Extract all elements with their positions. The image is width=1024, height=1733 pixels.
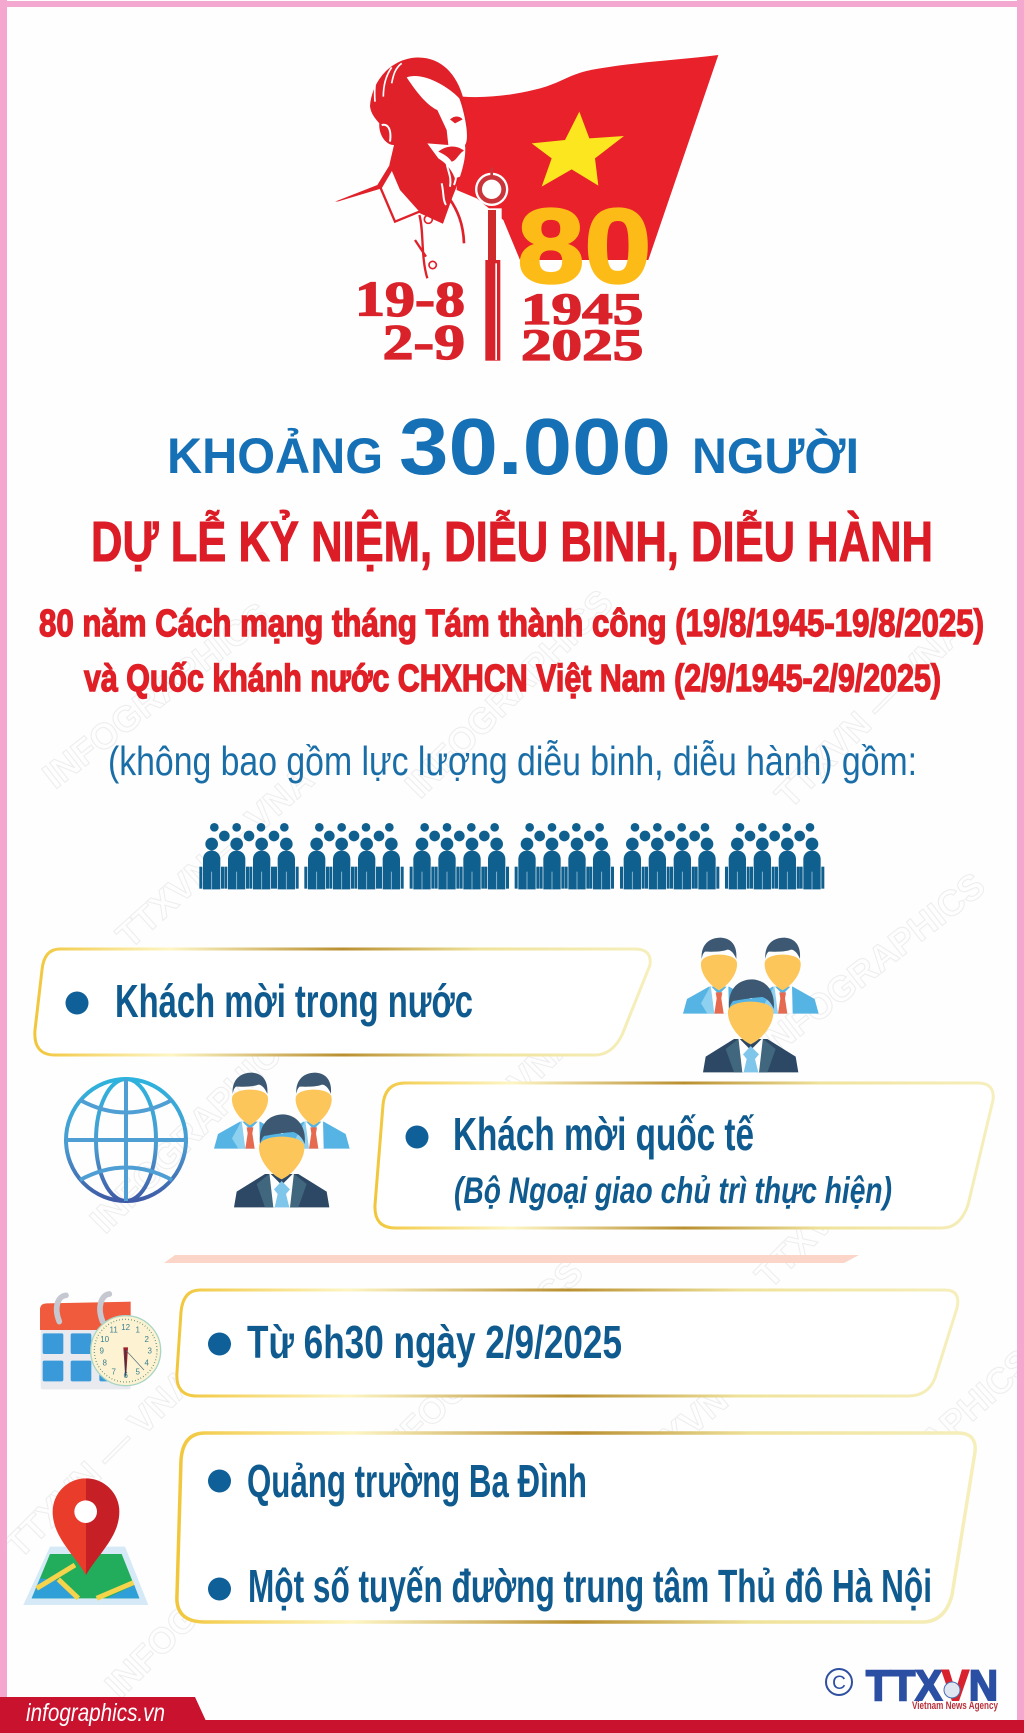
logo: TTXVN agency mark: C xyxy=(832,1673,846,1694)
text: TTXVN — VNA xyxy=(377,1020,582,1226)
footer band with site tab: infographics.vn xyxy=(26,1699,165,1727)
panel: international guests: Khách mời quốc tế xyxy=(453,1108,754,1160)
text: INFOGRAPHICS xyxy=(750,864,992,1066)
panel: domestic guests xyxy=(35,949,650,1055)
icon: calendar and clock xyxy=(40,1294,161,1389)
dates left: 19-8 xyxy=(355,271,465,326)
microphone xyxy=(475,167,508,361)
text: TTXVN — VNA xyxy=(0,1360,202,1566)
dates left: 2-9 xyxy=(383,315,465,370)
panel: venues xyxy=(177,1433,975,1622)
clock face: 6 xyxy=(123,1371,128,1380)
yellow star xyxy=(532,112,624,187)
clock face: 3 xyxy=(147,1347,152,1356)
clock face xyxy=(91,1316,161,1386)
clock face: 2 xyxy=(144,1335,149,1344)
years right xyxy=(521,285,643,369)
panel: venues: Quảng trường Ba Đình xyxy=(247,1455,587,1507)
subheading: two occasions xyxy=(39,603,984,700)
panel: time: Từ 6h30 ngày 2/9/2025 xyxy=(247,1316,622,1368)
portrait xyxy=(335,58,469,278)
clock face: 8 xyxy=(102,1358,107,1367)
footer band with site tab xyxy=(0,1697,1024,1733)
clock face: 9 xyxy=(99,1347,104,1356)
80 numeral: 80 xyxy=(517,188,651,306)
title: khoảng 30.000 người: 30.000 xyxy=(399,402,671,491)
logo: TTXVN agency mark: TTXVN xyxy=(866,1662,998,1710)
clock face: 10 xyxy=(100,1335,110,1344)
icon: rows of crowd figures xyxy=(199,823,824,889)
text: TTXVN — VNA xyxy=(108,758,321,956)
text: INFOGRAPHICS xyxy=(82,1016,306,1241)
title: khoảng 30.000 người: KHOẢNG xyxy=(167,428,383,484)
panel: international guests: (Bộ Ngoại giao chủ trì thực hiện) xyxy=(454,1170,892,1211)
icon: three domestic delegates xyxy=(683,938,819,1072)
text: INFOGRAPHICS xyxy=(367,1251,591,1476)
icon: three international delegates xyxy=(214,1073,350,1207)
icon: globe xyxy=(66,1079,186,1201)
clock face: 11 xyxy=(110,1326,118,1335)
text: TTXVN — VNA xyxy=(747,1090,952,1296)
title: khoảng 30.000 người xyxy=(167,402,859,491)
years right: 1945 xyxy=(521,285,643,334)
dates left xyxy=(355,271,465,370)
clock face: 7 xyxy=(111,1368,116,1377)
title: khoảng 30.000 người: NGƯỜI xyxy=(692,428,859,484)
clock face: 4 xyxy=(144,1358,149,1367)
panel: international guests xyxy=(375,1083,993,1228)
clock face: 12 xyxy=(121,1323,131,1332)
icon: map with location pin xyxy=(23,1478,148,1605)
years right: 2025 xyxy=(521,320,643,369)
panel: domestic guests: Khách mời trong nước xyxy=(115,975,473,1027)
text: TTXVN — VNA xyxy=(767,610,972,816)
text: INFOGRAPHICS xyxy=(97,1481,321,1706)
logo: 80th anniversary emblem xyxy=(335,55,718,370)
text: INFOGRAPHICS xyxy=(397,581,621,806)
panel: time xyxy=(177,1290,958,1396)
flag xyxy=(457,55,718,260)
clock face: 5 xyxy=(135,1368,140,1377)
clock face: 1 xyxy=(135,1326,140,1335)
text: INFOGRAPHICS xyxy=(35,594,277,796)
text: TTXVN xyxy=(619,1379,736,1486)
